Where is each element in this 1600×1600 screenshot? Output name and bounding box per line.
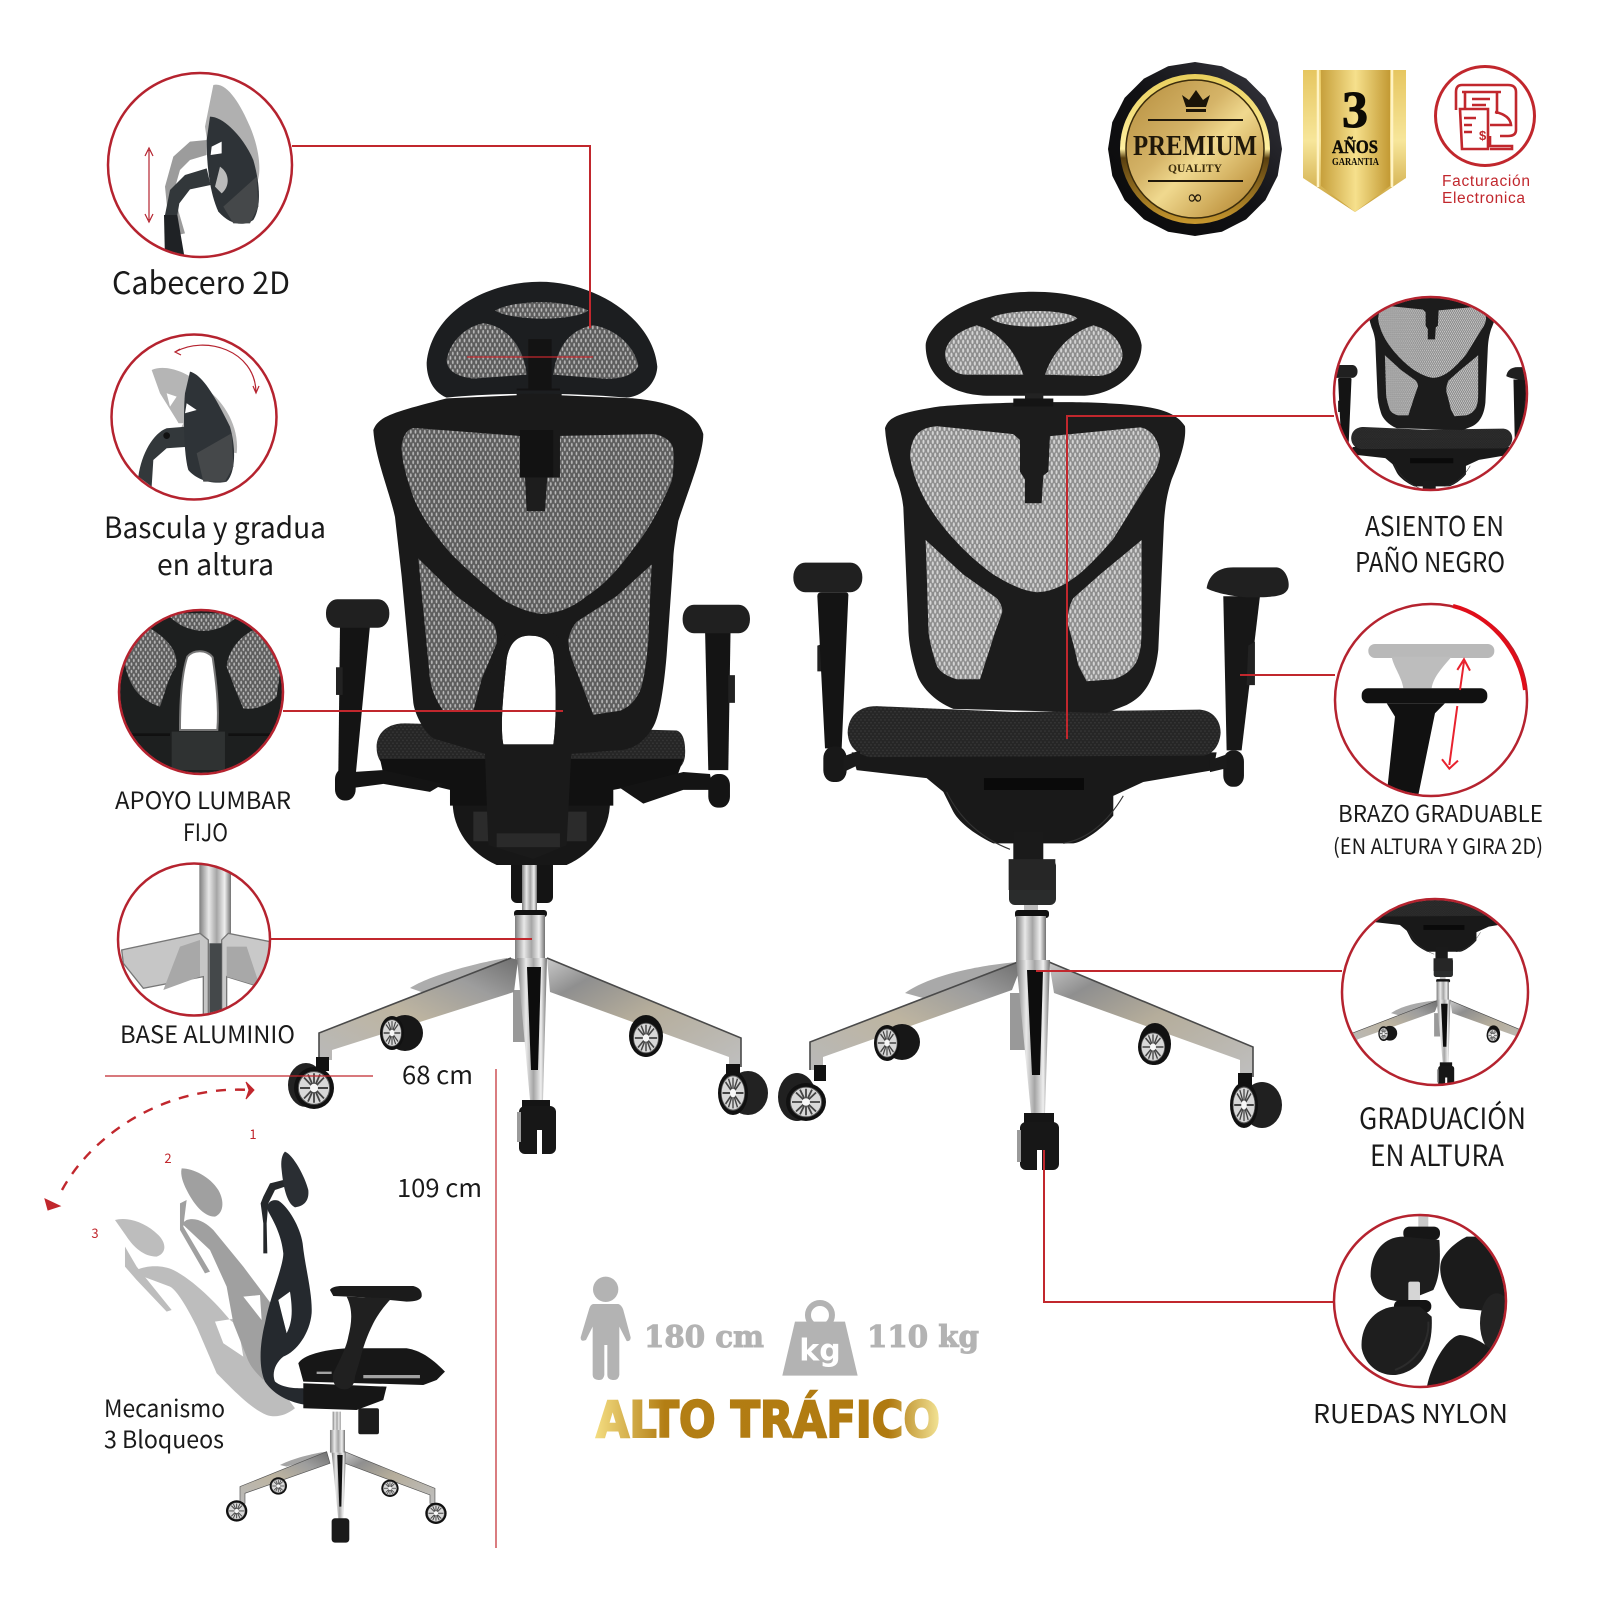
chair base rear [288,860,768,1156]
badge: facturacion electronica [1436,66,1534,207]
circle: graduacion en altura [1340,898,1530,1086]
label: apoyo lumbar: APOYO LUMBAR [115,781,291,816]
callout lines [270,146,1342,1302]
circle: asiento en paño negro [1332,296,1528,492]
front view chair [778,292,1289,1172]
badge: 3 años garantia: 3 [1342,82,1368,139]
label: bascula [104,505,326,584]
label: mecanismo 3 bloqueos [104,1389,225,1455]
label: mecanismo 3 bloqueos: 3 Bloqueos [104,1420,224,1455]
label: asiento: ASIENTO EN [1365,505,1504,544]
icon: person [581,1277,631,1380]
position numbers: 3 [91,1223,99,1242]
weight value: 110 kg [867,1320,979,1355]
badge: 3 años garantia: AÑOS [1332,136,1378,158]
label: brazo graduable [1333,795,1543,861]
label: bascula: en altura [157,542,274,584]
badge: facturacion electronica: Electronica [1442,190,1525,207]
circle: bascula [112,334,276,500]
chair upper front [793,292,1289,890]
dimension: 109 cm: 109 cm [397,1169,482,1205]
badge: facturacion electronica: Facturación [1442,173,1530,190]
position numbers: 1 [249,1124,257,1143]
chair upper rear [326,282,750,865]
badge: premium quality: ∞ [1187,185,1203,209]
label: graduacion: EN ALTURA [1370,1133,1504,1175]
badge: facturacion electronica: $ [1479,128,1487,143]
label: cabecero 2D: Cabecero 2D [112,258,290,303]
label: ruedas nylon: RUEDAS NYLON [1313,1394,1508,1431]
badge: 3 años garantia: GARANTIA [1332,157,1380,168]
circle: brazo graduable [1335,604,1527,796]
rear view chair [288,282,768,1156]
icon: weight: kg [799,1334,841,1369]
side chair with 3 lock positions [45,1082,447,1543]
label: asiento [1355,505,1505,580]
label: brazo graduable: BRAZO GRADUABLE [1338,795,1543,829]
label: asiento: PAÑO NEGRO [1355,541,1505,580]
position numbers: 2 [164,1148,172,1167]
dashed recline arrow [45,1082,254,1210]
label: graduacion: GRADUACIÓN [1359,1096,1526,1138]
badge: 3 años garantia [1303,70,1406,212]
label: apoyo lumbar [115,781,291,848]
circle: cabecero 2D [108,73,292,260]
label: bascula: Bascula y gradua [104,505,326,547]
position numbers [91,1124,257,1242]
badge: premium quality: QUALITY [1168,161,1222,175]
icon: weight [782,1303,858,1376]
circle: apoyo lumbar [117,607,287,777]
badge: premium quality: PREMIUM [1133,130,1257,162]
label: base aluminio: BASE ALUMINIO [120,1015,295,1050]
chair base front [778,860,1282,1172]
label: mecanismo 3 bloqueos: Mecanismo [104,1389,225,1424]
height value: 180 cm [644,1320,764,1355]
dimension: 68 cm: 68 cm [402,1056,473,1092]
label: apoyo lumbar: FIJO [183,813,228,848]
label: brazo graduable: (EN ALTURA Y GIRA 2D) [1333,831,1543,861]
label: graduacion [1359,1096,1526,1175]
side chair drawing [115,1152,447,1543]
heading: alto trafico: ALTO TRÁFICO [596,1390,940,1449]
circle: ruedas nylon [1334,1215,1513,1390]
circle: base aluminio [118,863,270,1017]
badge: premium quality [1108,62,1282,236]
